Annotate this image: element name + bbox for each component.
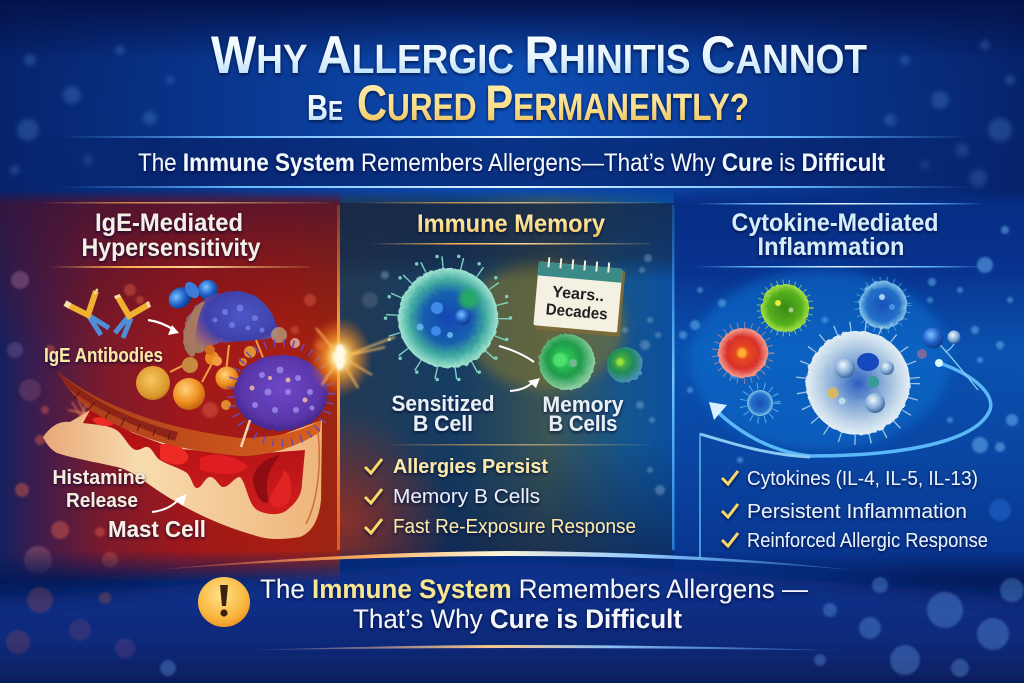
label: Histamine Release: Histamine <box>52 467 146 489</box>
checklist: cytokine effects <box>722 468 988 552</box>
heading: IgE-Mediated Hypersensitivity <box>82 209 261 262</box>
illustration: memory B cells <box>539 334 643 390</box>
panel: cytokine-mediated inflammation <box>674 190 1024 590</box>
panel: IgE-mediated hypersensitivity <box>0 190 340 590</box>
heading: Immune Memory: Immune Memory <box>417 210 605 238</box>
checklist: cytokine effects: Reinforced Allergic Response <box>747 530 988 552</box>
illustration: small blue cell <box>743 386 777 420</box>
illustration: blue cell <box>857 279 909 331</box>
callout text: The Immune System Remembers Allergens — <box>260 574 808 604</box>
checklist: immune memory: Memory B Cells <box>393 486 540 508</box>
heading: IgE-Mediated Hypersensitivity: IgE-Mediated <box>95 209 243 237</box>
illustration: green cell <box>759 282 811 334</box>
panel: immune memory <box>340 190 674 560</box>
illustration: red cell <box>715 325 771 381</box>
label: Mast Cell: Mast Cell <box>108 516 206 542</box>
title: BE <box>307 87 343 128</box>
checklist: immune memory: Fast Re-Exposure Response <box>393 516 636 538</box>
icon: IgE antibodies <box>65 291 150 338</box>
icon: cytokine molecules <box>917 328 978 390</box>
heading: Cytokine-Mediated Inflammation: Inflammation <box>758 233 904 261</box>
illustration: sensitized B cell <box>386 256 510 380</box>
checklist: cytokine effects: Cytokines (IL-4, IL-5, IL-13) <box>747 468 978 490</box>
arrow: B cell to memory cells <box>499 346 540 391</box>
footer backdrop <box>0 562 1024 683</box>
heading: IgE-Mediated Hypersensitivity: Hypersensitivity <box>82 234 261 262</box>
panel dividers <box>337 205 674 550</box>
label: Sensitized B Cell: Sensitized <box>392 391 494 416</box>
arrow: antibodies to cell <box>148 320 179 335</box>
subtitle text: The Immune System Remembers Allergens—That’s Why Cure is Difficult <box>138 149 886 177</box>
illustration: calendar Years.. Decades <box>533 256 626 337</box>
checklist: immune memory: Allergies Persist <box>393 456 548 478</box>
label: IgE Antibodies: IgE Antibodies <box>44 345 163 367</box>
label: Sensitized B Cell: B Cell <box>413 411 473 436</box>
callout text: That’s Why Cure is Difficult <box>353 604 682 634</box>
arrow: to mast cell <box>152 494 187 512</box>
title <box>211 26 867 131</box>
illustration: allergen-bound cell and granules <box>136 279 331 447</box>
checklist: cytokine effects: Persistent Inflammation <box>747 501 967 523</box>
arrow: cytokine feedback loop <box>700 359 991 558</box>
illustration: blood vessel and mast cell tissue <box>43 372 322 539</box>
icon: central starburst <box>308 317 395 397</box>
label: Sensitized B Cell <box>392 391 494 436</box>
footer banner <box>6 551 1024 677</box>
icon: warning <box>198 577 250 627</box>
label: Histamine Release: Release <box>66 490 138 512</box>
subtitle band <box>0 136 1024 188</box>
callout text <box>260 574 808 634</box>
illustration: large white cell <box>801 326 915 440</box>
title: WHY ALLERGIC RHINITIS CANNOT <box>211 26 867 85</box>
illustration: calendar Years.. Decades: Decades <box>545 301 608 324</box>
label: Histamine Release <box>52 467 146 512</box>
heading: Cytokine-Mediated Inflammation: Cytokine-Mediated <box>732 209 938 237</box>
label: Memory B Cells <box>542 392 624 436</box>
heading: Cytokine-Mediated Inflammation <box>732 209 938 261</box>
label: Memory B Cells: B Cells <box>548 411 618 436</box>
illustration: calendar Years.. Decades: Years.. <box>552 284 605 305</box>
checklist: immune memory <box>365 456 636 538</box>
label: Memory B Cells: Memory <box>542 392 624 417</box>
title: CURED PERMANENTLY? <box>357 75 749 131</box>
